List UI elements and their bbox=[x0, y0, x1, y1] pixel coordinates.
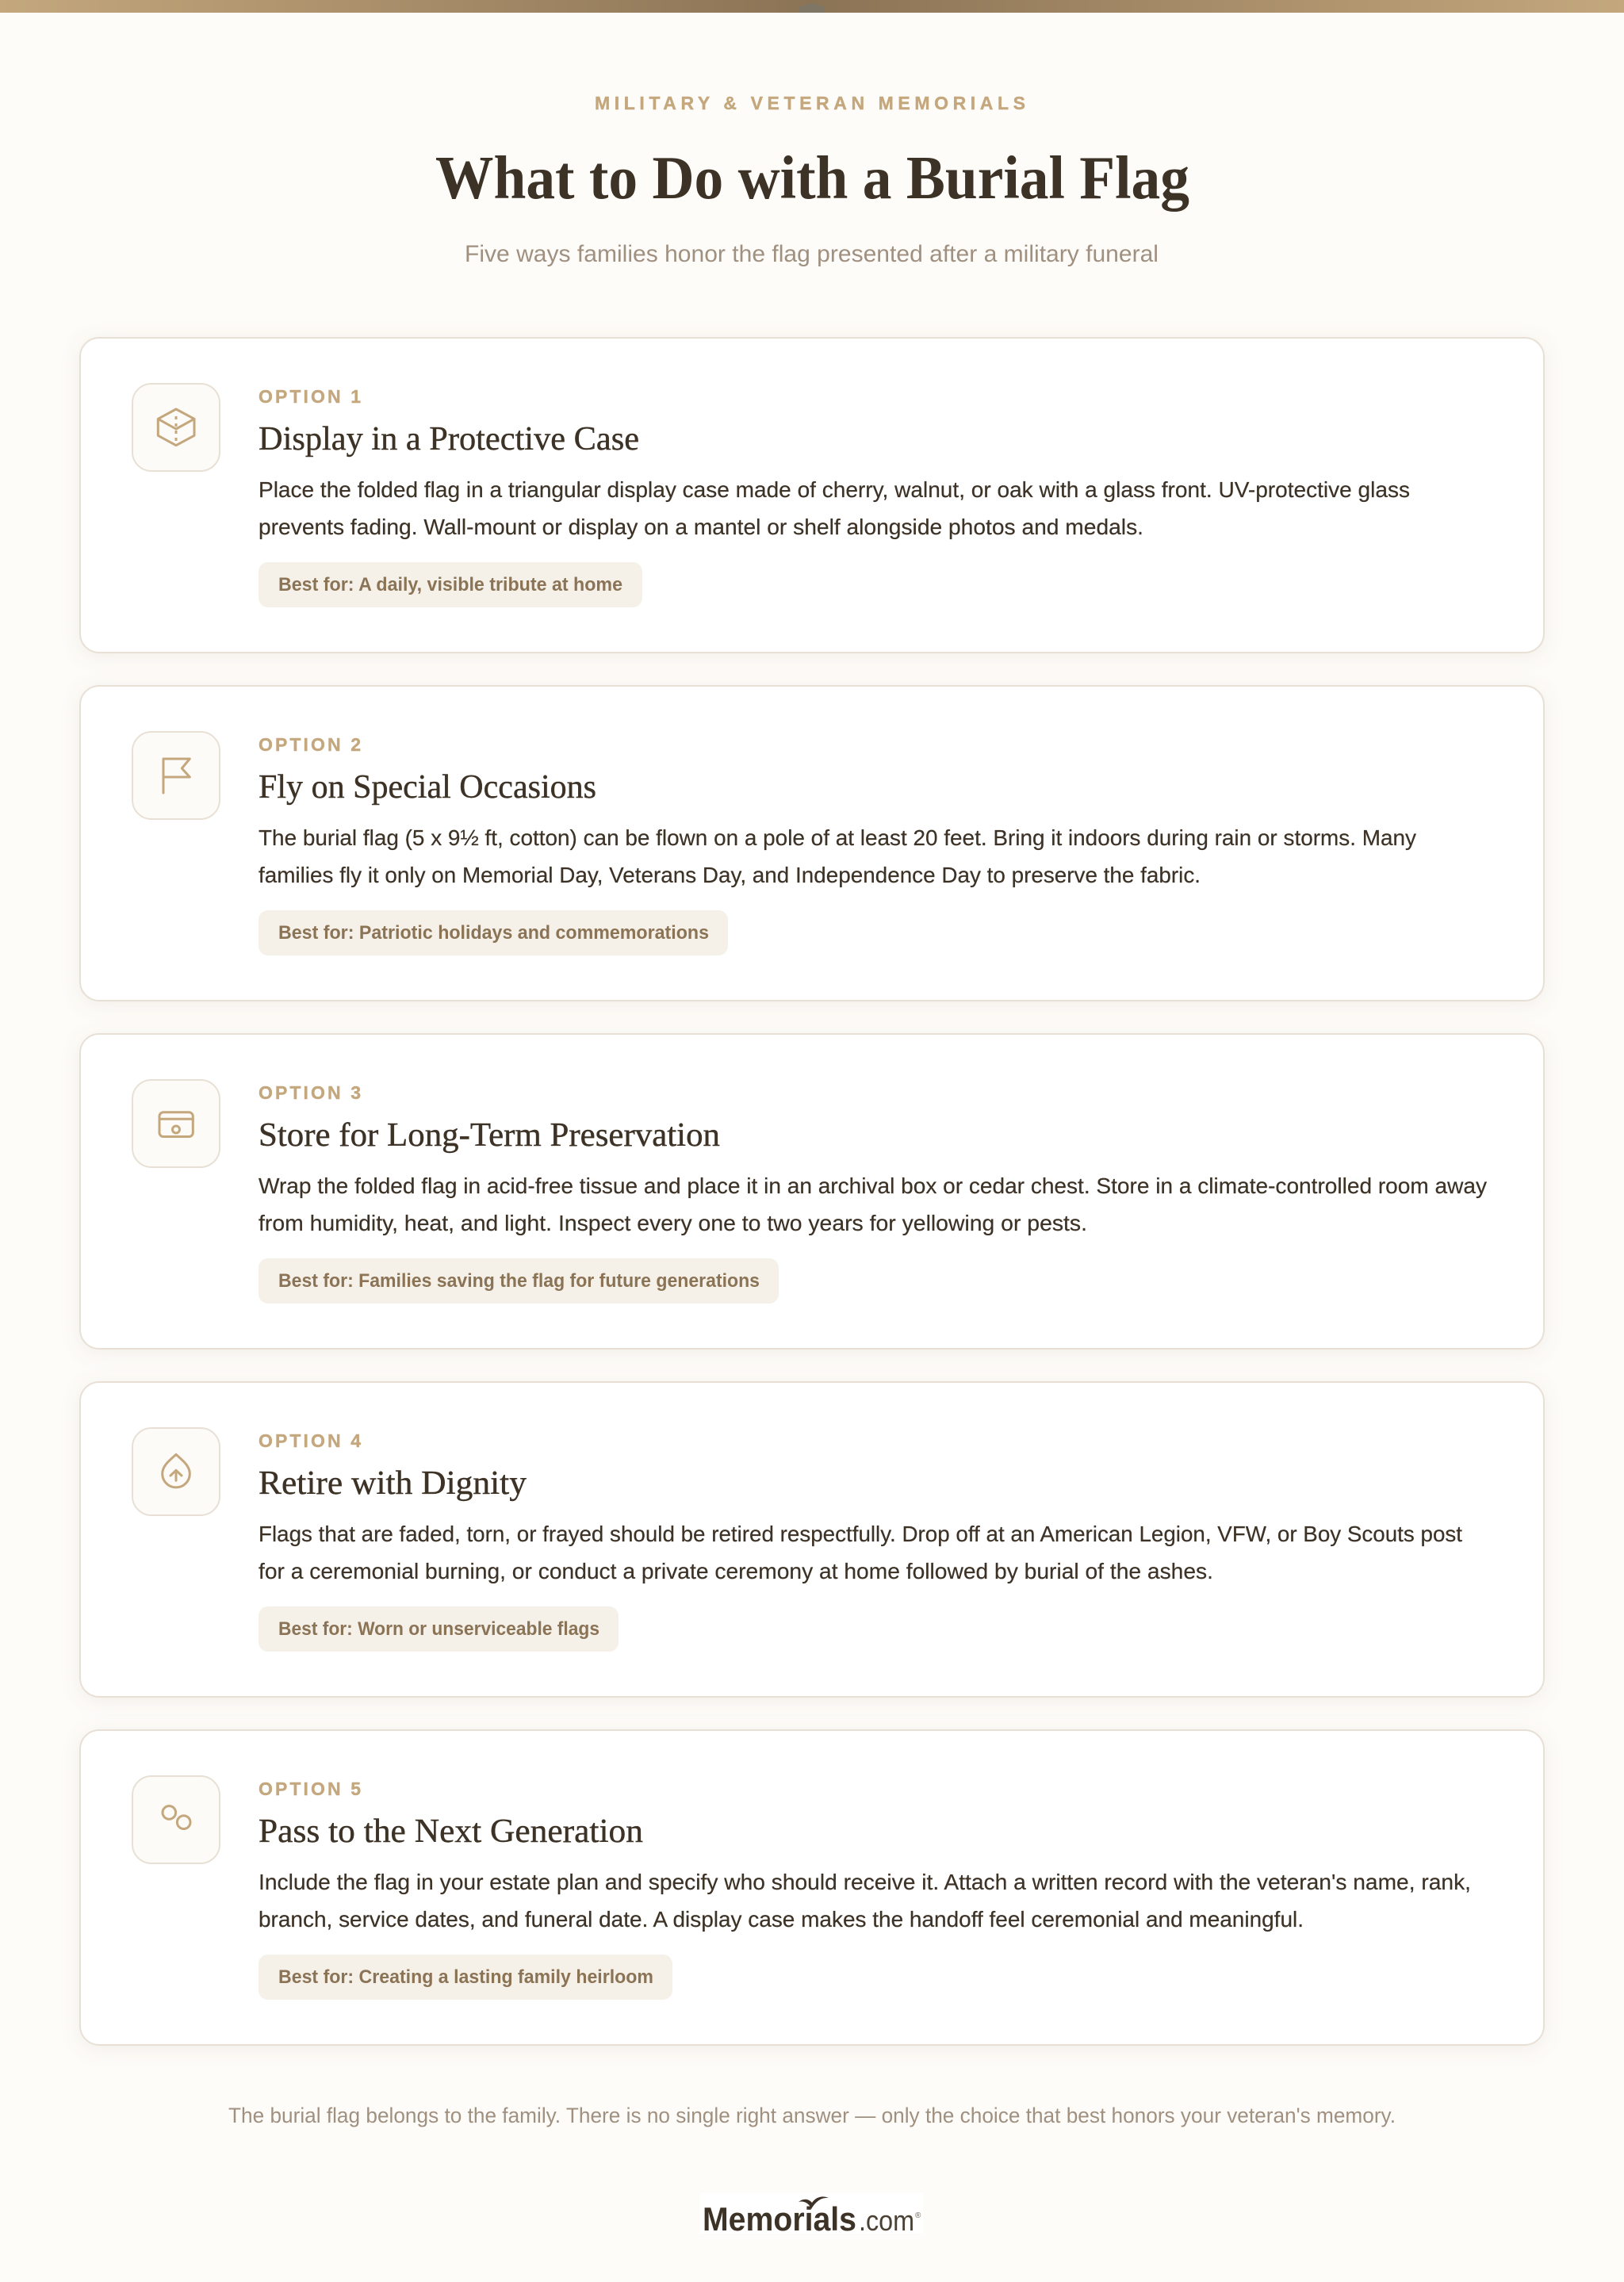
option label: OPTION 5 bbox=[259, 1779, 361, 1799]
icon: flag bbox=[163, 759, 190, 793]
best-for tag: Best for: Patriotic holidays and commemorations bbox=[278, 922, 709, 944]
description bbox=[259, 1522, 1462, 1583]
logo: Memorials.com bbox=[700, 2193, 923, 2238]
top gradient bar bbox=[0, 0, 1624, 13]
best-for tag bbox=[259, 1606, 619, 1652]
icon: flame drop bbox=[163, 1454, 190, 1488]
description: families fly it only on Memorial Day, Veterans Day, and Independence Day to preserve the fabric. bbox=[259, 863, 1201, 887]
best-for tag bbox=[259, 910, 728, 955]
description: Flags that are faded, torn, or frayed should be retired respectfully. Drop off at an American Legion, VFW, or Boy Scouts post bbox=[259, 1522, 1462, 1546]
description: branch, service dates, and funeral date. A display case makes the handoff feel ceremonial and meaningful. bbox=[259, 1907, 1304, 1932]
option label: OPTION 3 bbox=[259, 1082, 361, 1103]
footer note: The burial flag belongs to the family. There is no single right answer — only the choice that best honors your veteran's memory. bbox=[228, 2104, 1396, 2127]
logo: Memorials.com: Memorials bbox=[703, 2200, 856, 2238]
description bbox=[259, 477, 1410, 539]
panel: option 1 bbox=[80, 338, 1544, 653]
best-for tag: Best for: Families saving the flag for future generations bbox=[278, 1270, 760, 1292]
option title: Store for Long-Term Preservation bbox=[259, 1117, 720, 1154]
icon: storage box bbox=[159, 1112, 193, 1137]
title: What to Do with a Burial Flag bbox=[435, 144, 1189, 212]
description: The burial flag (5 x 9½ ft, cotton) can be flown on a pole of at least 20 feet. Bring it indoors during rain or storms. Many bbox=[259, 825, 1416, 850]
panel: option 3 bbox=[80, 1034, 1544, 1349]
icon: display case bbox=[158, 409, 194, 446]
description: for a ceremonial burning, or conduct a private ceremony at home followed by burial of the ashes. bbox=[259, 1559, 1213, 1583]
option label: OPTION 1 bbox=[259, 386, 361, 407]
description: Include the flag in your estate plan and specify who should receive it. Attach a written record with the veteran's name, rank, bbox=[259, 1870, 1471, 1894]
best-for tag bbox=[259, 1258, 779, 1304]
description: Place the folded flag in a triangular display case made of cherry, walnut, or oak with a glass front. UV-protective glass bbox=[259, 477, 1410, 502]
option title: Fly on Special Occasions bbox=[259, 769, 596, 806]
option label: OPTION 4 bbox=[259, 1430, 361, 1451]
description: Wrap the folded flag in acid-free tissue and place it in an archival box or cedar chest. Store in a climate-controlled room away bbox=[259, 1174, 1487, 1198]
option label: OPTION 2 bbox=[259, 734, 361, 755]
logo: Memorials.com: ® bbox=[915, 2211, 921, 2220]
header bbox=[435, 93, 1189, 267]
description: from humidity, heat, and light. Inspect every one to two years for yellowing or pests. bbox=[259, 1211, 1087, 1235]
panel: option 2 bbox=[80, 686, 1544, 1001]
best-for tag: Best for: Creating a lasting family heirloom bbox=[278, 1966, 653, 1988]
panel: option 5 bbox=[80, 1730, 1544, 2045]
best-for tag: Best for: A daily, visible tribute at home bbox=[278, 574, 622, 595]
best-for tag bbox=[259, 562, 642, 607]
best-for tag bbox=[259, 1955, 672, 2000]
description bbox=[259, 825, 1416, 887]
icon: linked rings bbox=[163, 1806, 190, 1828]
option title: Retire with Dignity bbox=[259, 1465, 527, 1502]
logo: Memorials.com: .com bbox=[859, 2204, 914, 2237]
option title: Display in a Protective Case bbox=[259, 421, 639, 458]
subtitle: Five ways families honor the flag presented after a military funeral bbox=[465, 241, 1159, 267]
panel: option 4 bbox=[80, 1382, 1544, 1697]
best-for tag: Best for: Worn or unserviceable flags bbox=[278, 1618, 599, 1640]
option title: Pass to the Next Generation bbox=[259, 1813, 643, 1850]
description: prevents fading. Wall-mount or display on a mantel or shelf alongside photos and medals. bbox=[259, 515, 1143, 539]
description bbox=[259, 1174, 1487, 1235]
eyebrow: MILITARY & VETERAN MEMORIALS bbox=[595, 93, 1025, 113]
description bbox=[259, 1870, 1471, 1932]
